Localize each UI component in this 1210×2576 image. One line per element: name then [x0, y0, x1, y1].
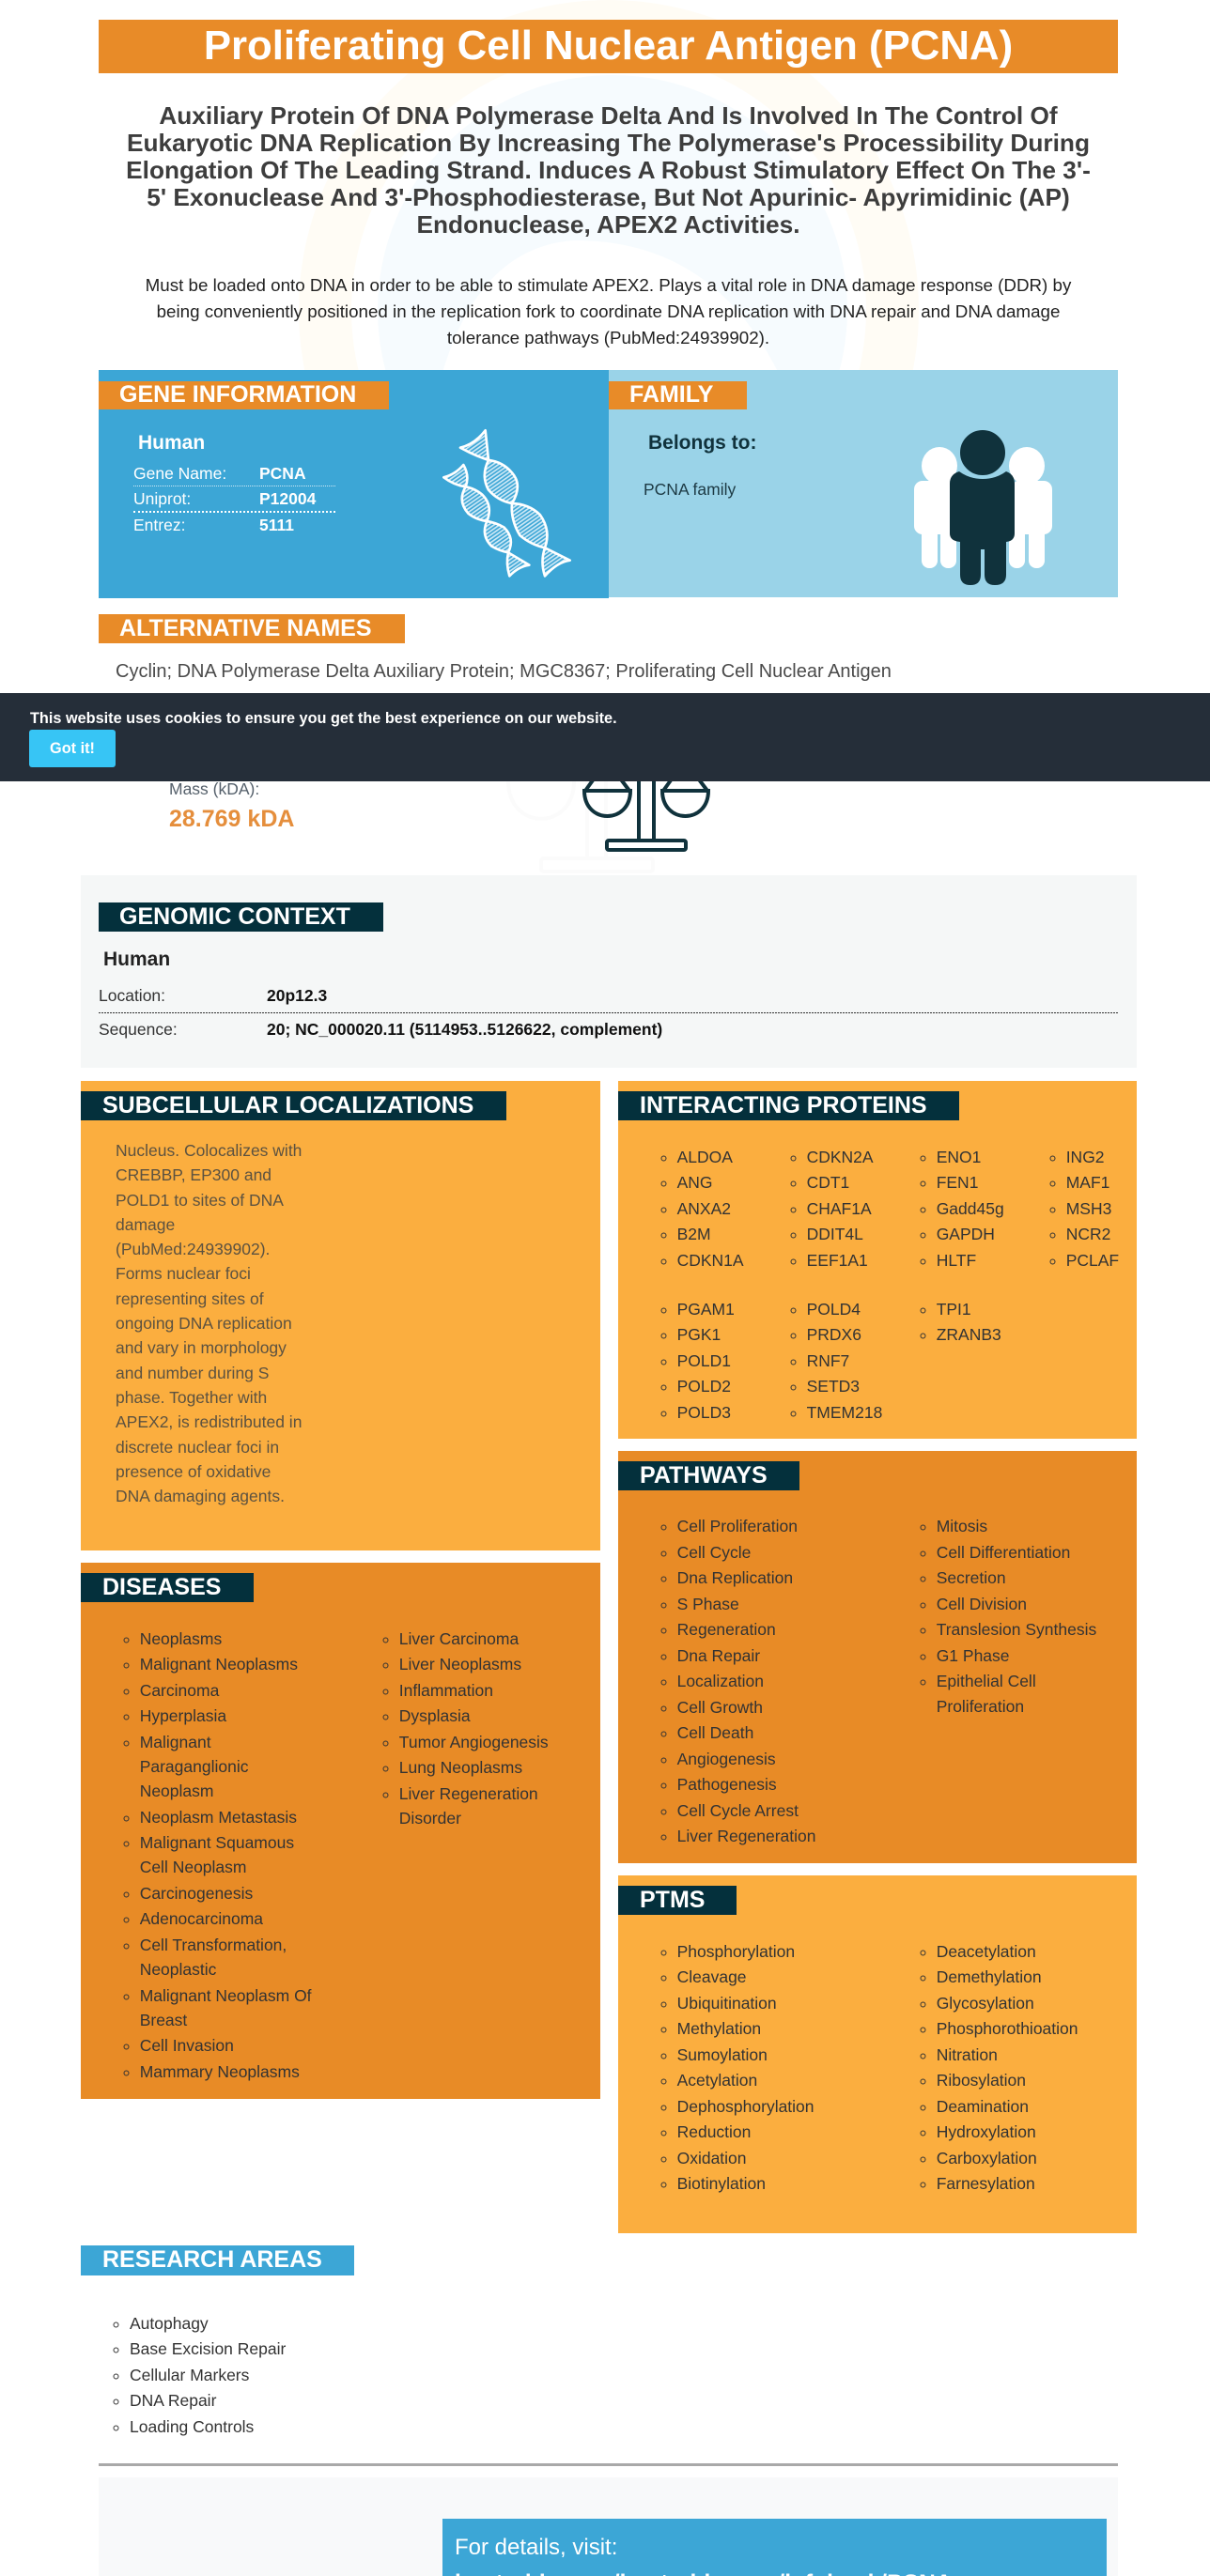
panel: ptms — [618, 1875, 1137, 2233]
panel: diseases — [81, 1563, 599, 2099]
localization text: discrete nuclear foci in — [116, 1438, 279, 1457]
mass label: Mass (kDA): — [169, 779, 259, 798]
gene info rows: 5111 — [259, 516, 294, 534]
species label: Human — [103, 949, 170, 970]
cookie banner — [0, 693, 1210, 781]
pathways list: Angiogenesis — [677, 1750, 776, 1768]
ptms list: Dephosphorylation — [677, 2097, 814, 2116]
protein list: CDT1 — [807, 1173, 849, 1192]
diseases list: Dysplasia — [399, 1706, 471, 1725]
subtitle: Eukaryotic DNA Replication By Increasing The Polymerase's Processibility During — [127, 128, 1090, 156]
diseases list: Cell Neoplasm — [140, 1858, 246, 1876]
protein list: CHAF1A — [807, 1198, 872, 1217]
localization text: ongoing DNA replication — [116, 1314, 292, 1333]
heading: family: FAMILY — [629, 381, 713, 408]
ptms list: Biotinylation — [677, 2174, 766, 2193]
diseases list: Neoplasm — [140, 1782, 213, 1800]
icon: balance scale — [582, 781, 710, 852]
subtitle: Auxiliary Protein Of DNA Polymerase Delta And Is Involved In The Control Of — [159, 101, 1058, 130]
diseases list: Liver Carcinoma — [399, 1629, 519, 1648]
gene info rows — [133, 464, 335, 534]
protein list: MSH3 — [1066, 1198, 1111, 1217]
ptms list: Deacetylation — [937, 1942, 1036, 1961]
pathways list: Liver Regeneration — [677, 1827, 815, 1845]
diseases list: Neoplasm Metastasis — [140, 1808, 297, 1827]
gene info rows: Gene Name: — [133, 464, 226, 483]
description paragraph: tolerance pathways (PubMed:24939902). — [447, 327, 769, 347]
protein list — [661, 1148, 1119, 1422]
panel: pathways — [618, 1451, 1137, 1863]
ptms list: Deamination — [937, 2097, 1029, 2116]
species label: Human — [138, 432, 205, 454]
diseases list: Malignant — [140, 1733, 211, 1751]
diseases list: Cell Invasion — [140, 2036, 234, 2055]
diseases list: Inflammation — [399, 1681, 493, 1700]
ptms list: Phosphorylation — [677, 1942, 795, 1961]
gene info rows: P12004 — [259, 489, 316, 508]
pathways list: Cell Differentiation — [937, 1543, 1070, 1562]
location row: Location: — [99, 986, 165, 1005]
diseases list: Malignant Neoplasms — [140, 1655, 298, 1674]
ptms list: Phosphorothioation — [937, 2019, 1078, 2038]
callout: details link: For details, visit: — [455, 2535, 617, 2560]
description paragraph — [146, 274, 1071, 347]
research areas list: Cellular Markers — [130, 2366, 249, 2384]
ptms list: Carboxylation — [937, 2149, 1037, 2167]
icon: people — [914, 430, 1052, 585]
subtitle: Endonuclease, APEX2 Activities. — [417, 210, 800, 239]
protein list: GAPDH — [937, 1225, 995, 1243]
location row — [99, 986, 327, 1005]
icon: ghost scale watermark — [498, 779, 667, 873]
research areas list: Loading Controls — [130, 2417, 254, 2436]
pathways list: S Phase — [677, 1595, 739, 1613]
protein list: PCLAF — [1066, 1251, 1119, 1270]
cookie button: Got it! — [50, 740, 95, 757]
pathways list: Translesion Synthesis — [937, 1620, 1096, 1639]
research areas list: Autophagy — [130, 2314, 209, 2333]
gene info rows: Entrez: — [133, 516, 185, 534]
heading: family — [609, 381, 746, 409]
localization text: phase. Together with — [116, 1388, 267, 1407]
ptms list: Glycosylation — [937, 1994, 1034, 2013]
callout: details link — [442, 2519, 1107, 2576]
diseases list: Breast — [140, 2011, 187, 2029]
ptms list: Ribosylation — [937, 2071, 1026, 2090]
alternative names text: Cyclin; DNA Polymerase Delta Auxiliary Protein; MGC8367; Proliferating Cell Nuclear Antigen — [116, 661, 892, 682]
ptms list: Nitration — [937, 2045, 998, 2064]
protein list: POLD2 — [677, 1377, 731, 1396]
sequence row: 20; NC_000020.11 (5114953..5126622, complement) — [267, 1020, 662, 1039]
diseases list — [124, 1629, 549, 2081]
pathways list: Cell Death — [677, 1723, 753, 1742]
heading: interacting proteins: INTERACTING PROTEINS — [640, 1092, 927, 1118]
localization text: representing sites of — [116, 1289, 264, 1308]
pathways list: Cell Cycle Arrest — [677, 1801, 799, 1820]
protein list: RNF7 — [807, 1351, 849, 1370]
description paragraph: Must be loaded onto DNA in order to be able to stimulate APEX2. Plays a vital role in DNA damage response (DDR) by — [146, 274, 1071, 295]
pathways list: Pathogenesis — [677, 1775, 777, 1794]
cookie message: This website uses cookies to ensure you get the best experience on our website. — [30, 710, 617, 727]
protein list: POLD4 — [807, 1300, 861, 1319]
panel: genomic context — [81, 875, 1137, 1068]
protein list: CDKN2A — [807, 1148, 874, 1166]
localization text: (PubMed:24939902). — [116, 1240, 270, 1258]
research areas list: DNA Repair — [130, 2391, 216, 2410]
localization text: presence of oxidative — [116, 1462, 271, 1481]
ptms list: Oxidation — [677, 2149, 747, 2167]
protein list: Gadd45g — [937, 1198, 1004, 1217]
diseases list: Carcinogenesis — [140, 1884, 253, 1903]
gene info rows: Uniprot: — [133, 489, 191, 508]
heading: genomic context: GENOMIC CONTEXT — [119, 903, 350, 930]
heading: diseases — [81, 1573, 254, 1602]
protein list: ENO1 — [937, 1148, 981, 1166]
title: Proliferating Cell Nuclear Antigen (PCNA) — [204, 23, 1013, 69]
localization text: and number during S — [116, 1364, 269, 1382]
cookie button — [29, 730, 116, 767]
localization text: APEX2, is redistributed in — [116, 1412, 302, 1431]
pathways list — [661, 1517, 1096, 1845]
diseases list: Tumor Angiogenesis — [399, 1733, 549, 1751]
pathways list: Cell Growth — [677, 1698, 763, 1717]
diseases list: Paraganglionic — [140, 1757, 248, 1776]
pathways list: Dna Repair — [677, 1646, 760, 1665]
protein list: ING2 — [1066, 1148, 1105, 1166]
diseases list: Lung Neoplasms — [399, 1758, 522, 1777]
ptms list: Sumoylation — [677, 2045, 768, 2064]
panel: interacting proteins — [618, 1081, 1137, 1439]
ptms list: Cleavage — [677, 1967, 747, 1986]
localization text: CREBBP, EP300 and — [116, 1165, 271, 1184]
diseases list: Carcinoma — [140, 1681, 219, 1700]
protein list: FEN1 — [937, 1173, 978, 1192]
family name: PCNA family — [644, 480, 736, 499]
protein list: DDIT4L — [807, 1225, 863, 1243]
panel: gene information — [99, 370, 609, 597]
title — [99, 20, 1118, 73]
pathways list: Cell Cycle — [677, 1543, 751, 1562]
diseases list: Liver Regeneration — [399, 1784, 538, 1803]
diseases list: Neoplasms — [140, 1629, 222, 1648]
pathways list: Cell Division — [937, 1595, 1027, 1613]
location row: 20p12.3 — [267, 986, 327, 1005]
panel: subcellular localizations — [81, 1081, 599, 1550]
protein list: HLTF — [937, 1251, 976, 1270]
panel: details footer — [99, 2477, 1118, 2576]
diseases list: Neoplastic — [140, 1960, 216, 1979]
gene info rows: PCNA — [259, 464, 306, 483]
mass value: 28.769 kDA — [169, 806, 294, 832]
heading: diseases: DISEASES — [102, 1574, 221, 1600]
ptms list: Farnesylation — [937, 2174, 1035, 2193]
subtitle: Elongation Of The Leading Strand. Induces A Robust Stimulatory Effect On The 3'- — [126, 156, 1091, 184]
protein list: PRDX6 — [807, 1325, 861, 1344]
protein list: MAF1 — [1066, 1173, 1109, 1192]
description paragraph: being conveniently positioned in the replication fork to coordinate DNA replication with DNA repair and DNA damage — [157, 301, 1060, 321]
subtitle: 5' Exonuclease And 3'-Phosphodiesterase, But Not Apurinic- Apyrimidinic (AP) — [147, 182, 1070, 210]
diseases list: Cell Transformation, — [140, 1936, 287, 1954]
ptms list: Hydroxylation — [937, 2122, 1036, 2141]
protein list: PGK1 — [677, 1325, 721, 1344]
belongs to label: Belongs to: — [648, 432, 757, 454]
protein list: NCR2 — [1066, 1225, 1110, 1243]
protein list: TMEM218 — [807, 1403, 882, 1422]
diseases list: Adenocarcinoma — [140, 1909, 263, 1928]
pathways list: Mitosis — [937, 1517, 987, 1535]
protein list: ZRANB3 — [937, 1325, 1001, 1344]
protein list: CDKN1A — [677, 1251, 744, 1270]
pathways list: G1 Phase — [937, 1646, 1010, 1665]
heading: alternative names: ALTERNATIVE NAMES — [119, 615, 372, 641]
ptms list: Demethylation — [937, 1967, 1042, 1986]
ptms list: Ubiquitination — [677, 1994, 777, 2013]
pathways list: Secretion — [937, 1568, 1006, 1587]
heading: gene information: GENE INFORMATION — [119, 381, 356, 408]
protein list: ANG — [677, 1173, 713, 1192]
pathways list: Epithelial Cell — [937, 1672, 1036, 1690]
localization text: damage — [116, 1215, 175, 1234]
diseases list: Liver Neoplasms — [399, 1655, 521, 1674]
pathways list: Localization — [677, 1672, 764, 1690]
protein list: SETD3 — [807, 1377, 860, 1396]
protein list: ANXA2 — [677, 1198, 731, 1217]
sequence row: Sequence: — [99, 1020, 178, 1039]
protein list: TPI1 — [937, 1300, 971, 1319]
ptms list — [661, 1942, 1078, 2193]
heading: subcellular localizations: SUBCELLULAR LOCALIZATIONS — [102, 1092, 473, 1118]
icon: dna helices — [442, 428, 571, 578]
localization text — [116, 1141, 302, 1505]
background watermark — [299, 0, 919, 370]
protein list: EEF1A1 — [807, 1251, 868, 1270]
heading: ptms — [618, 1886, 737, 1915]
pathways list: Proliferation — [937, 1697, 1024, 1716]
diseases list: Disorder — [399, 1809, 461, 1828]
localization text: and vary in morphology — [116, 1338, 287, 1357]
ptms list: Acetylation — [677, 2071, 757, 2090]
research areas list: Base Excision Repair — [130, 2339, 286, 2358]
diseases list: Malignant Neoplasm Of — [140, 1986, 312, 2005]
protein list: PGAM1 — [677, 1300, 735, 1319]
diseases list: Hyperplasia — [140, 1706, 226, 1725]
localization text: Nucleus. Colocalizes with — [116, 1141, 302, 1160]
panel: family — [609, 370, 1118, 597]
heading: research areas: RESEARCH AREAS — [102, 2246, 322, 2273]
heading: pathways — [618, 1461, 799, 1490]
ptms list: Reduction — [677, 2122, 751, 2141]
localization text: Forms nuclear foci — [116, 1264, 251, 1283]
pathways list: Regeneration — [677, 1620, 776, 1639]
pathways list: Cell Proliferation — [677, 1517, 798, 1535]
heading: pathways: PATHWAYS — [640, 1462, 768, 1489]
localization text: POLD1 to sites of DNA — [116, 1191, 284, 1210]
protein list: POLD1 — [677, 1351, 731, 1370]
protein list: POLD3 — [677, 1403, 731, 1422]
protein list: ALDOA — [677, 1148, 733, 1166]
subtitle — [126, 101, 1091, 239]
diseases list: Mammary Neoplasms — [140, 2062, 300, 2081]
protein list: B2M — [677, 1225, 711, 1243]
pathways list: Dna Replication — [677, 1568, 793, 1587]
diseases list: Malignant Squamous — [140, 1833, 294, 1852]
localization text: DNA damaging agents. — [116, 1487, 285, 1505]
ptms list: Methylation — [677, 2019, 761, 2038]
heading: ptms: PTMS — [640, 1887, 705, 1913]
research areas list — [113, 2314, 286, 2436]
